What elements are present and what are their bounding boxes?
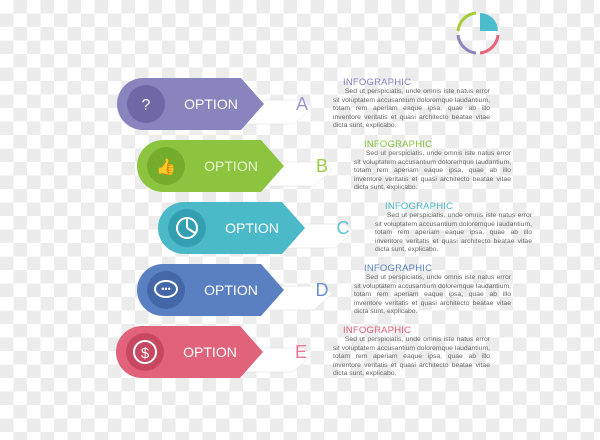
option C: OPTION (225, 220, 279, 236)
option B: OPTION (204, 158, 258, 174)
text A: INFOGRAPHIC (343, 77, 411, 88)
option E: OPTION (183, 344, 237, 360)
option A: OPTION (184, 96, 238, 112)
option D (137, 264, 332, 316)
option D: OPTION (204, 282, 258, 298)
option E: E (295, 342, 307, 362)
text B: INFOGRAPHIC (364, 139, 432, 150)
option D: ••• (161, 284, 171, 294)
option E: $ (141, 345, 150, 362)
text E: Sed ut perspiciatis, unde omnis iste natus error sit voluptatem accusantium doloremque laudantium, totam rem aperiam eaque ipsa, quae ab illo inventore veritatis et quasi architecto beatae vitae dicta sunt, explicabo. (333, 336, 490, 377)
text B: Sed ut perspiciatis, unde omnis iste natus error sit voluptatem accusantium doloremque laudantium, totam rem aperiam eaque ipsa, quae ab illo inventore veritatis et quasi architecto beatae vitae dicta sunt, explicabo. (354, 150, 511, 191)
text E: INFOGRAPHIC (343, 325, 411, 336)
option C: C (336, 218, 350, 238)
text C: INFOGRAPHIC (385, 201, 453, 212)
option B (137, 140, 332, 192)
option A (117, 78, 312, 130)
text D: Sed ut perspiciatis, unde omnis iste natus error sit voluptatem accusantium doloremque laudantium, totam rem aperiam eaque ipsa, quae ab illo inventore veritatis et quasi architecto beatae vitae dicta sunt, explicabo. (354, 274, 511, 315)
option C (158, 202, 353, 254)
option D: D (316, 280, 328, 300)
text A: Sed ut perspiciatis, unde omnis iste natus error sit voluptatem accusantium doloremque laudantium, totam rem aperiam eaque ipsa, quae ab illo inventore veritatis et quasi architecto beatae vitae dicta sunt, explicabo. (333, 88, 490, 129)
text C: Sed ut perspiciatis, unde omnis iste natus error sit voluptatem accusantium doloremque laudantium, totam rem aperiam eaque ipsa, quae ab illo inventore veritatis et quasi architecto beatae vitae dicta sunt, explicabo. (375, 212, 532, 253)
text D: INFOGRAPHIC (364, 263, 432, 274)
option A: A (296, 94, 308, 114)
option B: B (316, 156, 328, 176)
option E (116, 326, 311, 378)
option A: ? (142, 97, 151, 114)
icon: ring chart (456, 12, 500, 54)
option B: 👍 (156, 157, 176, 176)
